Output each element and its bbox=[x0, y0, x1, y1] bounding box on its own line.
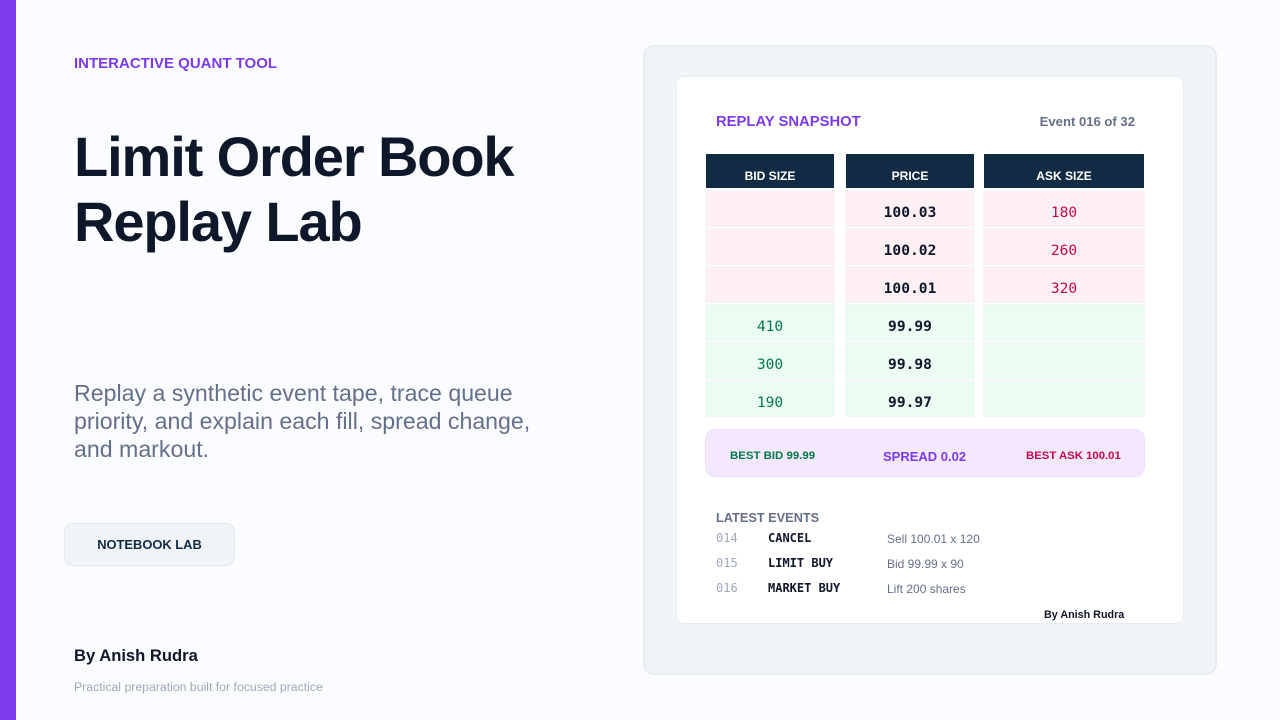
order book table: 100.01 bbox=[884, 280, 936, 297]
header: bid size bbox=[706, 154, 834, 188]
order book table: 180 bbox=[1051, 204, 1077, 221]
description bbox=[74, 380, 530, 462]
order book table: 100.02 bbox=[884, 242, 936, 259]
event 014: 014 bbox=[716, 531, 738, 545]
header: ask size bbox=[984, 154, 1144, 188]
order book table: 99.99 bbox=[888, 318, 932, 335]
list heading: LATEST EVENTS bbox=[716, 510, 819, 525]
header: price bbox=[846, 154, 974, 188]
summary bar bbox=[705, 429, 1145, 477]
latest events list: LIMIT BUY bbox=[768, 556, 833, 570]
order book table: 99.98 bbox=[888, 356, 932, 373]
description: priority, and explain each fill, spread change, bbox=[74, 408, 530, 434]
snapshot heading: REPLAY SNAPSHOT bbox=[716, 114, 861, 130]
badge: notebook lab: NOTEBOOK LAB bbox=[97, 537, 202, 552]
order book table: 100.03 bbox=[884, 204, 936, 221]
event 015: 015 bbox=[716, 556, 738, 570]
header: price: PRICE bbox=[892, 169, 928, 183]
best bid: BEST BID 99.99 bbox=[730, 450, 815, 462]
order book table: 300 bbox=[757, 356, 783, 373]
badge: notebook lab bbox=[64, 523, 235, 566]
title bbox=[74, 125, 514, 253]
event counter: Event 016 of 32 bbox=[1040, 114, 1135, 129]
latest events list: Lift 200 shares bbox=[887, 582, 966, 596]
description: and markout. bbox=[74, 436, 209, 462]
card background bbox=[676, 76, 1184, 624]
title: Replay Lab bbox=[74, 190, 362, 253]
latest events list: Sell 100.01 x 120 bbox=[887, 532, 980, 546]
panel: replay frame bbox=[643, 45, 1217, 675]
order book table: 99.97 bbox=[888, 394, 932, 411]
title: Limit Order Book bbox=[74, 125, 513, 188]
order book table: 410 bbox=[757, 318, 783, 335]
accent bar bbox=[0, 0, 16, 720]
eyebrow label: INTERACTIVE QUANT TOOL bbox=[74, 55, 277, 72]
latest events list: CANCEL bbox=[768, 531, 811, 545]
order book table: 320 bbox=[1051, 280, 1077, 297]
order book table: 190 bbox=[757, 394, 783, 411]
latest events list: MARKET BUY bbox=[768, 581, 840, 595]
latest events list: Bid 99.99 x 90 bbox=[887, 557, 964, 571]
description: Replay a synthetic event tape, trace queue bbox=[74, 380, 513, 406]
author: By Anish Rudra bbox=[74, 646, 198, 665]
spread: SPREAD 0.02 bbox=[883, 449, 966, 464]
order book table bbox=[705, 154, 1145, 417]
tagline: Practical preparation built for focused practice bbox=[74, 680, 323, 694]
event 016: 016 bbox=[716, 581, 738, 595]
card byline: By Anish Rudra bbox=[1044, 609, 1124, 621]
latest events list bbox=[716, 510, 980, 596]
order book table: 260 bbox=[1051, 242, 1077, 259]
header: ask size: ASK SIZE bbox=[1036, 169, 1092, 183]
best ask: BEST ASK 100.01 bbox=[1026, 450, 1121, 462]
header: bid size: BID SIZE bbox=[745, 169, 795, 183]
